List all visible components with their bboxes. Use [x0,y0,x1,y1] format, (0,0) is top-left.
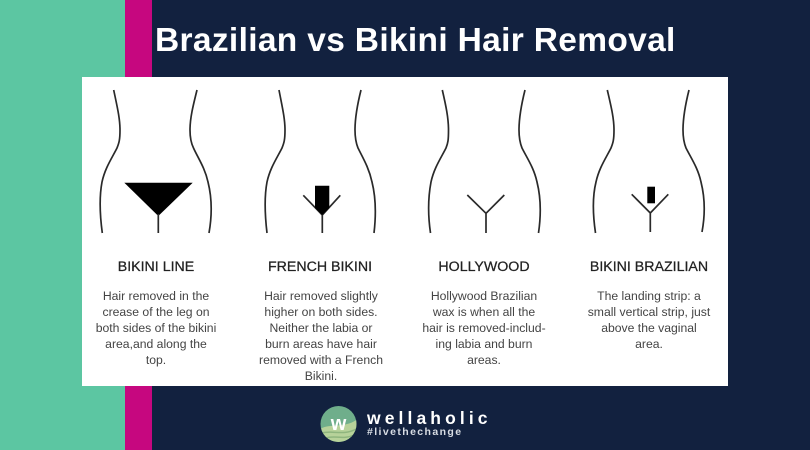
text: hollywood description [422,288,546,367]
text: bikini brazilian description: above the vaginal [601,321,697,335]
text: french bikini description: Neither the labia or [270,321,372,335]
text: bikini line description: Hair removed in the [103,288,209,302]
icon: bikini brazilian figure [593,90,704,233]
background: green band [0,0,125,450]
panel: white card [82,77,728,386]
text: hollywood description: wax is when all the [433,305,535,319]
icon: bikini line figure [100,90,211,233]
text: french bikini description: Bikini. [305,369,337,383]
icon: wellaholic logo [320,406,356,442]
text: bikini brazilian description: The landing strip: a [597,288,701,302]
heading: hollywood: HOLLYWOOD [438,259,530,275]
heading: bikini brazilian: BIKINI BRAZILIAN [590,259,708,275]
text: french bikini description [259,288,383,383]
heading: bikini line: BIKINI LINE [118,259,194,275]
text: french bikini description: Hair removed slightly [264,288,378,302]
text: hollywood description: Hollywood Brazilian [431,288,537,302]
icon: wellaholic logo: w [330,413,347,435]
background: magenta band [125,0,152,450]
text: bikini line description: top. [146,353,166,367]
brand name: wellaholic [367,408,492,428]
text: bikini line description: area,and along the [105,337,207,351]
heading: french bikini: FRENCH BIKINI [268,259,372,275]
brand tagline: #livethechange [367,426,462,438]
text: french bikini description: removed with a French [259,353,383,367]
text: bikini line description: both sides of the bikini [96,321,216,335]
text: bikini brazilian description: area. [635,337,663,351]
icon: hollywood figure [429,90,540,233]
text: hollywood description: ing labia and burn [436,337,532,351]
text: bikini line description [96,288,216,367]
figures illustration [99,90,706,234]
icon: french bikini figure [265,90,375,233]
text: hollywood description: areas. [467,353,501,367]
text: hollywood description: hair is removed-includ- [422,321,546,335]
title: Brazilian vs Bikini Hair Removal [155,22,676,59]
text: bikini line description: crease of the leg on [102,305,210,319]
text: bikini brazilian description: small vertical strip, just [588,305,710,319]
text: french bikini description: higher on both sides. [264,305,378,319]
text: french bikini description: burn areas have hair [265,337,377,351]
text: bikini brazilian description [588,288,710,351]
